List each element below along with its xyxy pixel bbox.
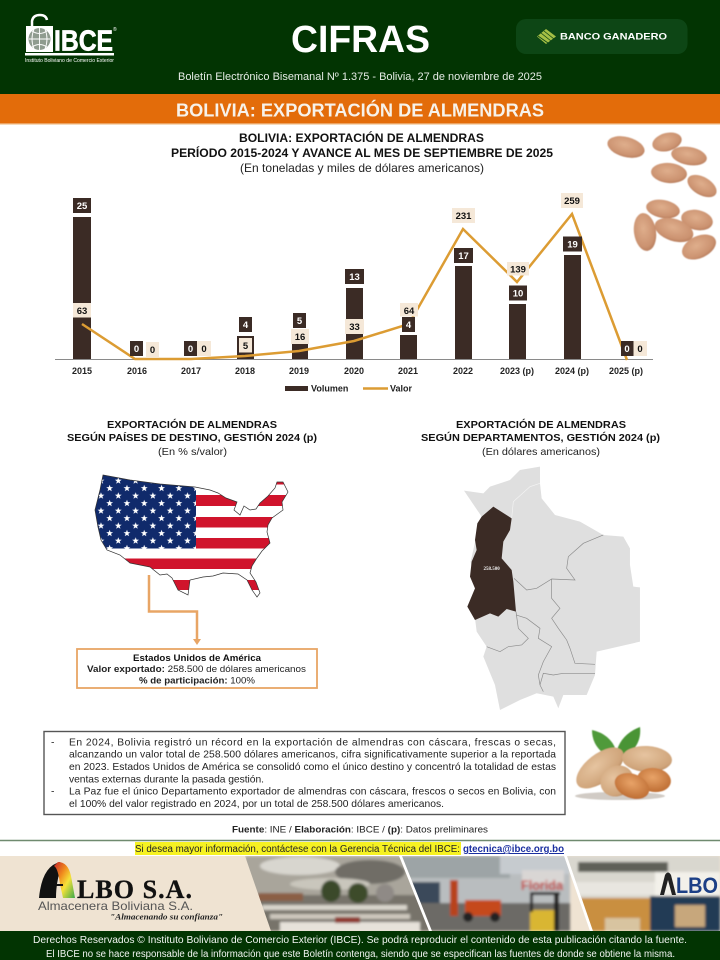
- x axis labels: 2015: [72, 366, 92, 376]
- volume data labels: [73, 198, 634, 356]
- legend: Volumen: [311, 384, 348, 394]
- volume data labels: 4: [243, 320, 249, 331]
- x axis labels: 2018: [235, 366, 255, 376]
- photo: vehicle yard: [245, 856, 430, 931]
- logo: ALBO: LBO S.A.: [77, 875, 192, 904]
- text box: key findings: ventas externas durante la pasada gestión.: [69, 774, 264, 786]
- image: almonds with shell and leaves: [569, 727, 673, 804]
- x axis labels: 2016: [127, 366, 147, 376]
- heading: departments: SEGÚN DEPARTAMENTOS, GESTIÓN 2024 (p): [421, 431, 660, 444]
- map: United States with flag: [94, 474, 288, 598]
- value data labels: 259: [564, 196, 580, 207]
- callout: United States export value: Valor exportado: 258.500 de dólares americanos: [87, 664, 306, 675]
- logo: IBCE: [25, 15, 117, 64]
- department: La Paz: [467, 507, 516, 620]
- banner: page heading: BOLIVIA: EXPORTACIÓN DE ALMENDRAS: [176, 100, 544, 120]
- value data labels: 16: [295, 332, 305, 343]
- logo: IBCE: Instituto Boliviano de Comercio Exterior: [25, 58, 114, 64]
- x axis labels: 2017: [181, 366, 201, 376]
- value data labels: 0: [150, 345, 155, 356]
- text box: key findings: En 2024, Bolivia registró un récord en la exportación de almendras con cáscara, frescas o secas,: [69, 738, 556, 748]
- value data labels: 64: [404, 306, 415, 317]
- chart heading: (En toneladas y miles de dólares americanos): [240, 161, 484, 175]
- text box: key findings: [44, 732, 565, 814]
- logo: ALBO: "Almacenando su confianza": [110, 912, 223, 922]
- text box: key findings: La Paz fue el único Departamento exportador de almendras con cáscara, frescos o secos en Bolivia, con: [69, 786, 556, 798]
- volume data labels: 17: [458, 251, 469, 262]
- text box: key findings: -: [51, 738, 54, 748]
- volume data labels: 13: [349, 272, 360, 283]
- volume data labels: 25: [77, 201, 88, 212]
- photo: warehouse: [565, 856, 720, 931]
- text box: key findings: -: [51, 786, 54, 798]
- value data labels: 63: [77, 306, 87, 317]
- chart heading: [171, 130, 553, 175]
- logo: ALBO: [38, 862, 223, 922]
- logo: Banco Ganadero: [516, 19, 688, 54]
- contact line: gtecnica@ibce.org.bo: [463, 844, 564, 855]
- value data labels: 0: [637, 344, 643, 355]
- footer: copyright: Derechos Reservados © Instituto Boliviano de Comercio Exterior (IBCE). Se podrá reproducir el contenido de esta publicación citando la fuente.: [33, 934, 687, 946]
- x axis labels: [72, 366, 643, 376]
- value data labels: 0: [201, 344, 207, 355]
- x axis labels: 2025 (p): [609, 366, 643, 376]
- source note: Fuente: INE / Elaboración: IBCE / (p): Datos preliminares: [232, 824, 488, 836]
- callout: United States export value: % de participación: 100%: [139, 676, 256, 686]
- header band: [0, 0, 720, 94]
- x axis labels: 2022: [453, 366, 473, 376]
- volume data labels: 5: [297, 316, 303, 327]
- volume bars: [73, 217, 581, 359]
- photo: airport forklift: Florida: [521, 877, 563, 893]
- logo: IBCE: IBCE: [54, 26, 113, 58]
- volume data labels: 0: [624, 344, 630, 355]
- heading: departments: EXPORTACIÓN DE ALMENDRAS: [456, 418, 626, 431]
- logo: ALBO: Almacenera Boliviana S.A.: [38, 899, 193, 913]
- volume data labels: 19: [567, 240, 578, 250]
- title: CIFRAS: CIFRAS: [291, 19, 430, 61]
- heading: destination countries: SEGÚN PAÍSES DE DESTINO, GESTIÓN 2024 (p): [67, 431, 317, 444]
- contact line: Si desea mayor información, contáctese con la Gerencia Técnica del IBCE:: [135, 844, 460, 855]
- x axis labels: 2020: [344, 366, 364, 376]
- value data labels: [73, 193, 647, 357]
- chart heading: BOLIVIA: EXPORTACIÓN DE ALMENDRAS: [239, 130, 484, 145]
- x axis labels: 2024 (p): [555, 366, 589, 376]
- heading: destination countries: EXPORTACIÓN DE ALMENDRAS: [107, 418, 277, 431]
- value data labels: 33: [349, 322, 360, 333]
- value line: [82, 214, 627, 360]
- x axis labels: 2023 (p): [500, 366, 534, 376]
- heading: destination countries: [67, 418, 317, 458]
- legend: [285, 384, 413, 394]
- text box: key findings: alcanzando un valor total de 258.500 dólares americanos, cifra significativamente superior a la reportada: [69, 750, 556, 760]
- heading: departments: [421, 418, 660, 458]
- footer: copyright: [0, 931, 720, 960]
- heading: departments: (En dólares americanos): [482, 446, 600, 458]
- map: Bolivia departments: [464, 467, 640, 710]
- value data labels: 139: [510, 264, 526, 276]
- department: La Paz: 258.500: [484, 567, 500, 572]
- arrow: map to callout: [149, 575, 201, 645]
- value data labels: 231: [456, 211, 472, 222]
- combo chart: volume bars and value line: [55, 193, 653, 394]
- subtitle: Boletín Electrónico Bisemanal Nº 1.375 - Bolivia, 27 de noviembre de 2025: [178, 71, 542, 83]
- volume data labels: 0: [134, 344, 139, 355]
- x axis labels: 2021: [398, 366, 418, 376]
- callout: United States export value: Estados Unidos de América: [133, 653, 262, 664]
- volume data labels: 4: [406, 320, 412, 331]
- chart heading: PERÍODO 2015-2024 Y AVANCE AL MES DE SEPTIEMBRE DE 2025: [171, 145, 553, 160]
- advertising banner: ALBO S.A.: [0, 856, 720, 931]
- footer: copyright: El IBCE no se hace responsable de la información que este Boletín contenga, siendo que se especifican las fuentes de donde se obtiene la misma.: [46, 949, 675, 960]
- volume data labels: 0: [188, 344, 193, 355]
- value data labels: 5: [243, 341, 249, 352]
- logo: IBCE: ®: [113, 26, 117, 33]
- legend: Valor: [390, 384, 413, 394]
- x axis labels: 2019: [289, 366, 309, 376]
- logo: Banco Ganadero: BANCO GANADERO: [560, 32, 667, 42]
- contact line: [135, 842, 564, 855]
- photo: airport forklift: [400, 856, 570, 931]
- text box: key findings: en 2023. Estados Unidos de América se consolidó como el único destino y concentró la totalidad de estas: [69, 762, 556, 773]
- banner: page heading: [0, 94, 720, 125]
- heading: destination countries: (En % s/valor): [158, 446, 227, 458]
- image: almonds top right: [605, 129, 720, 265]
- text box: key findings: el 100% del valor registrado en 2024, por un total de 258.500 dólares americanos.: [69, 799, 444, 810]
- volume data labels: 10: [513, 288, 523, 300]
- callout: United States export value: [77, 649, 317, 688]
